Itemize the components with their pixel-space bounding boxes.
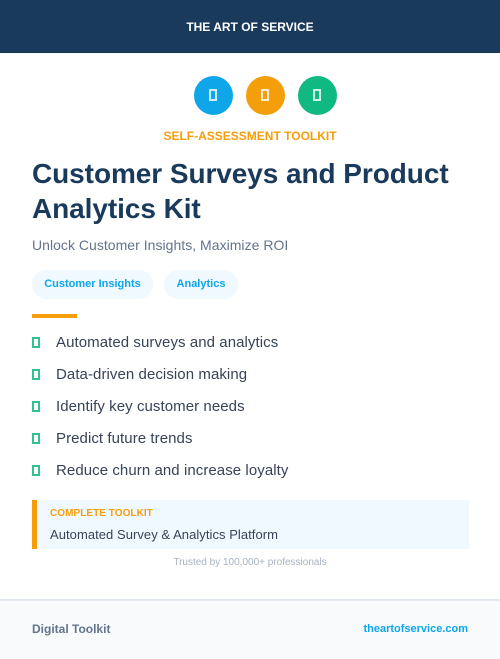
footer	[0, 599, 500, 659]
title: Customer Surveys and Product	[32, 158, 449, 189]
feature 5: Reduce churn and increase loyalty	[56, 462, 288, 479]
tag: Customer Insights	[32, 270, 153, 299]
feature list	[32, 334, 288, 479]
title	[32, 158, 449, 224]
footer left label: Digital Toolkit	[32, 622, 110, 636]
callout accent bar	[32, 500, 37, 549]
icon: green circle	[298, 76, 337, 115]
header band	[0, 0, 500, 53]
feature 3: Identify key customer needs	[56, 398, 245, 415]
tag: Customer Insights: Customer Insights	[44, 278, 141, 290]
tag: Analytics	[164, 270, 238, 299]
bullet 5	[32, 465, 40, 476]
footer link: theartofservice.com	[363, 623, 468, 635]
accent divider	[32, 314, 77, 318]
icon: orange circle	[246, 76, 285, 115]
callout text: Automated Survey & Analytics Platform	[50, 527, 278, 542]
callout: complete toolkit	[32, 500, 469, 549]
trust note: Trusted by 100,000+ professionals	[173, 557, 327, 568]
brand name: THE ART OF SERVICE	[186, 20, 314, 34]
subtitle: Unlock Customer Insights, Maximize ROI	[32, 237, 288, 253]
bullet 2	[32, 369, 40, 380]
eyebrow label: SELF-ASSESSMENT TOOLKIT	[163, 129, 337, 143]
title: Analytics Kit	[32, 193, 201, 224]
tag: Analytics: Analytics	[177, 278, 225, 290]
callout label: COMPLETE TOOLKIT	[50, 508, 153, 519]
feature 4: Predict future trends	[56, 430, 193, 447]
bullet 4	[32, 433, 40, 444]
bullet 3	[32, 401, 40, 412]
feature 1: Automated surveys and analytics	[56, 334, 278, 351]
bullet 1	[32, 337, 40, 348]
icon: blue circle	[194, 76, 233, 115]
feature 2: Data-driven decision making	[56, 366, 247, 383]
